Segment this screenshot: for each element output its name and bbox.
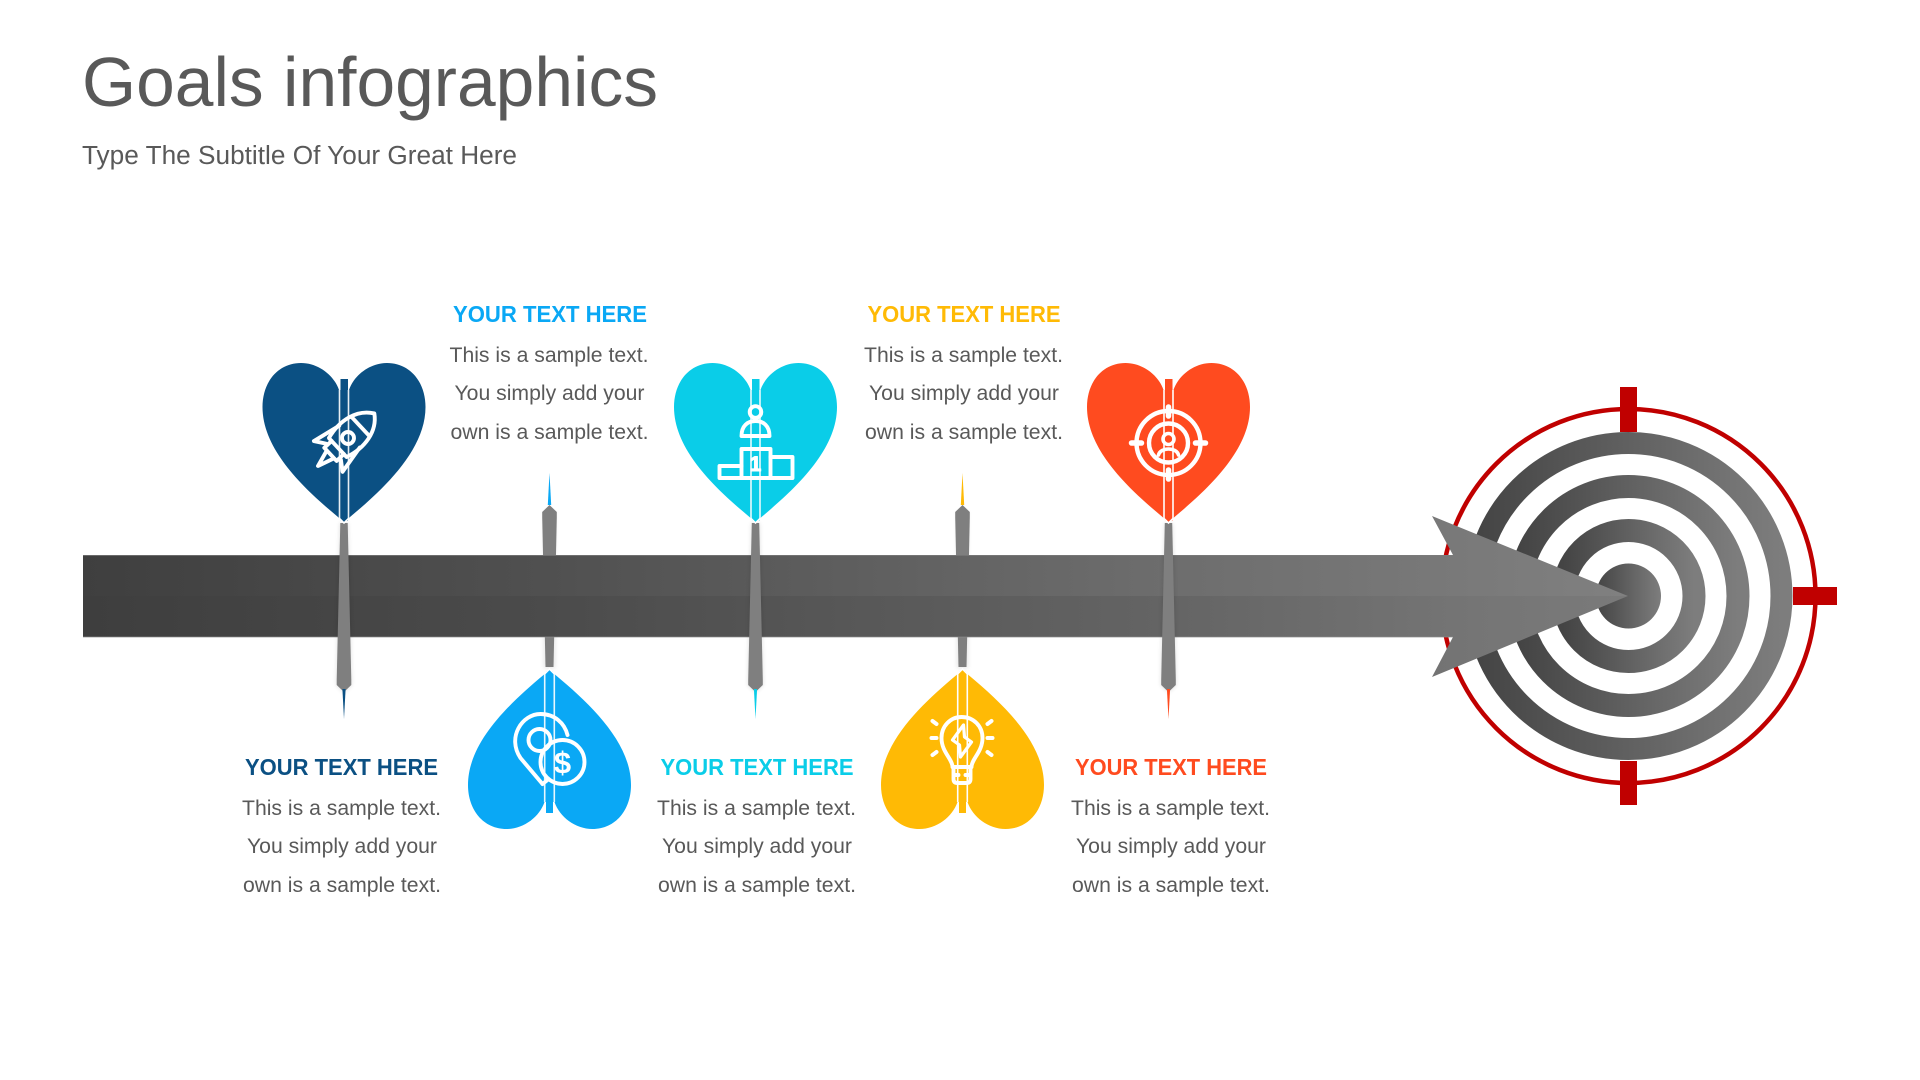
target crosshair ticks [1620,387,1837,805]
body 2 [450,343,648,444]
heart 1 [262,363,426,523]
body 3: own is a sample text. [658,873,856,897]
dart 5 target person [1087,363,1250,719]
heart 2 inverted [468,669,631,829]
icon: pin and coin: $ [554,745,571,780]
body 4: You simply add your [869,381,1059,405]
icon: rocket [304,398,389,481]
body 5: You simply add your [1076,834,1266,858]
body 4: own is a sample text. [865,420,1063,444]
heart 5 [1087,363,1250,523]
body 1 [242,796,441,897]
text block 5 [1071,754,1270,897]
dart 3 shaft [748,523,763,719]
dart 3 podium [674,363,837,719]
subtitle: Type The Subtitle Of Your Great Here [82,142,517,170]
dart 1 rocket [262,363,426,719]
target bullseye [1596,564,1661,628]
heart 3 [674,363,837,523]
heading 2: YOUR TEXT HERE [453,301,647,327]
heading 1: YOUR TEXT HERE [245,754,438,780]
body 5: This is a sample text. [1071,796,1270,820]
heart 4 inverted [881,669,1044,829]
text block 2 [450,301,648,444]
icon: pin and coin [515,714,584,784]
text block 3 [657,754,856,897]
icon: podium [720,406,792,478]
dart 1 shaft [337,523,351,719]
dart 5 shaft [1161,523,1176,719]
body 4: This is a sample text. [864,343,1063,367]
body 5 [1071,796,1270,897]
icon: light bulb [932,717,992,783]
body 3 [657,796,856,897]
text block 4 [864,301,1063,444]
dart 2 shaft behind arrow [542,473,557,668]
body 2: own is a sample text. [450,420,648,444]
heading 4: YOUR TEXT HERE [868,301,1060,327]
dart 4 shaft behind arrow [955,473,970,668]
body 4 [864,343,1063,444]
arrow [83,516,1628,677]
body 5: own is a sample text. [1072,873,1270,897]
body 2: You simply add your [454,381,644,405]
icon: target person [1132,407,1206,479]
body 1: own is a sample text. [243,873,441,897]
title: Goals infographics [82,43,658,121]
icon: podium: 1 [750,453,762,476]
body 3: You simply add your [662,834,852,858]
body 1: This is a sample text. [242,796,441,820]
target [1442,387,1837,805]
body 1: You simply add your [247,834,437,858]
heading 3: YOUR TEXT HERE [660,754,854,780]
target outer red ring [1442,409,1816,783]
body 2: This is a sample text. [450,343,648,367]
arrow bottom half [83,596,1628,677]
body 3: This is a sample text. [657,796,856,820]
text block 1 [242,754,441,897]
target rings [1476,443,1782,749]
heading 5: YOUR TEXT HERE [1075,754,1267,780]
arrow top half [83,516,1628,596]
